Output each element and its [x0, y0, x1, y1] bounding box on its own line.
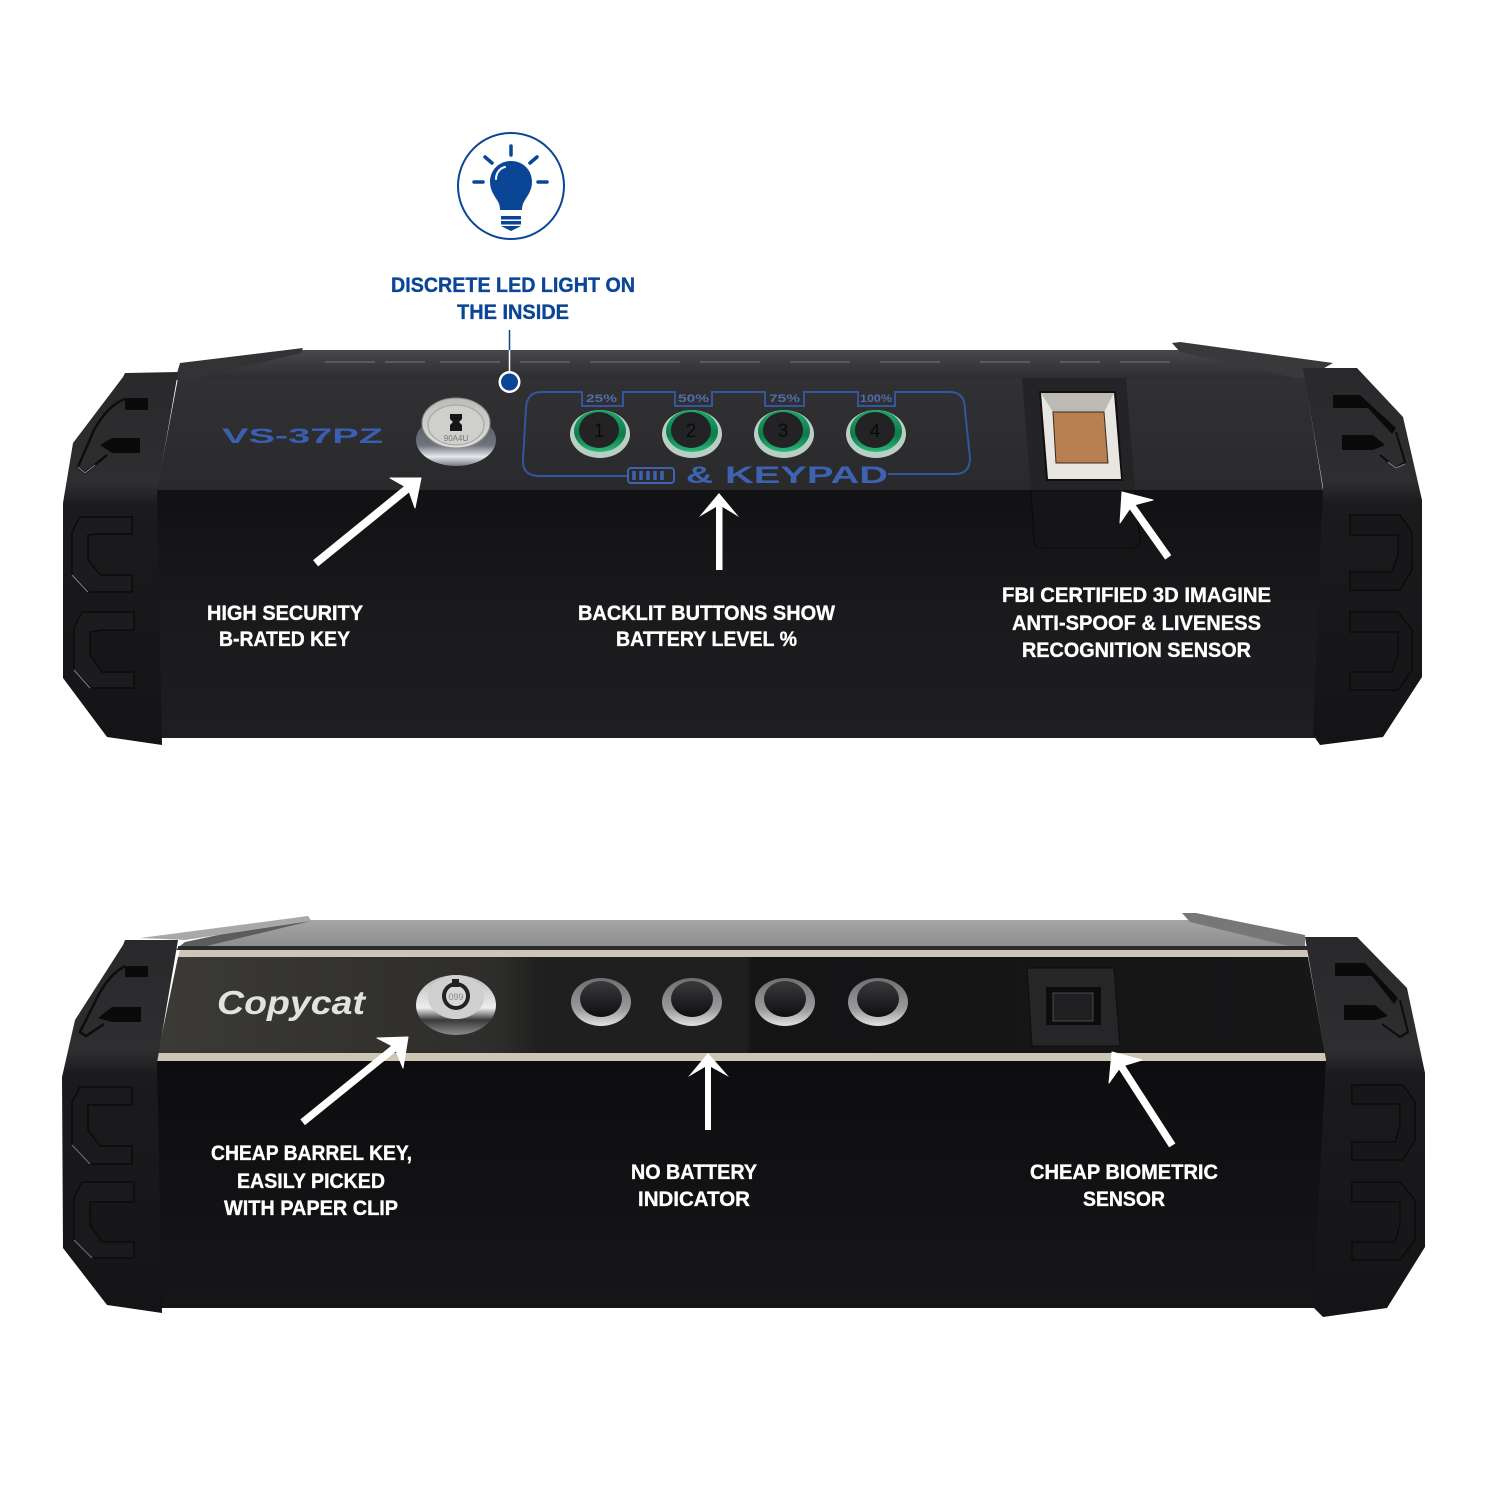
arrow: buttons	[699, 493, 739, 570]
label: high security key: HIGH SECURITY	[207, 602, 363, 625]
panel: VS-37PZ safe	[63, 342, 1422, 745]
icon: light bulb	[458, 133, 564, 239]
right cap grip details	[1352, 1085, 1415, 1260]
label: FBI certified sensor: ANTI-SPOOF & LIVENESS	[1012, 612, 1261, 635]
left end cap	[63, 372, 178, 745]
backlit button 3: 3	[778, 421, 788, 442]
plain button 4	[848, 978, 908, 1026]
key lock: 90A4U	[444, 434, 468, 443]
copycat label: Copycat	[217, 984, 367, 1021]
backlit button 4: 4	[870, 421, 881, 442]
label: cheap barrel key: WITH PAPER CLIP	[224, 1197, 398, 1220]
keypad outline and labels: 50%	[678, 393, 709, 405]
right cap grip details	[1350, 515, 1412, 690]
body lower	[150, 1061, 1330, 1308]
backlit button 3	[754, 410, 814, 458]
model label: VS-37PZ	[222, 425, 383, 448]
label: backlit buttons	[578, 602, 835, 651]
battery icon	[628, 468, 674, 483]
left cap grip details	[72, 1087, 134, 1258]
front panel lower	[150, 490, 1328, 738]
label: backlit buttons: BACKLIT BUTTONS SHOW	[578, 602, 835, 625]
top surface	[175, 920, 1310, 950]
plain button 3	[755, 978, 815, 1026]
fingerprint sensor	[1022, 378, 1140, 548]
right top flap	[1172, 342, 1333, 380]
heading: LED light callout: THE INSIDE	[457, 301, 569, 324]
keypad outline and labels: 25%	[586, 393, 617, 405]
upper trim strip	[178, 950, 1308, 957]
backlit button 4	[846, 410, 906, 458]
label: cheap barrel key: CHEAP BARREL KEY,	[211, 1142, 412, 1165]
heading: LED light callout	[391, 274, 635, 324]
backlit button 1: 1	[594, 421, 604, 442]
left top flap	[175, 916, 311, 950]
left cap handle details	[80, 966, 148, 1036]
label: FBI certified sensor: RECOGNITION SENSOR	[1022, 639, 1251, 662]
key lock	[416, 398, 496, 466]
label: FBI certified sensor: FBI CERTIFIED 3D IMAGINE	[1002, 584, 1271, 607]
label: high security key: B-RATED KEY	[219, 628, 350, 651]
arrow: cheap sensor	[1109, 1052, 1175, 1147]
left cap handle details	[78, 398, 148, 473]
arrow: sensor	[1120, 492, 1171, 559]
keypad label: KEYPAD	[725, 462, 888, 489]
keypad label	[686, 462, 888, 489]
heading: LED light callout: DISCRETE LED LIGHT ON	[391, 274, 635, 297]
arrow: barrel key	[301, 1037, 408, 1124]
right cap handle details	[1335, 963, 1408, 1037]
front panel upper	[157, 378, 1323, 490]
arrow: key	[314, 478, 421, 566]
left flap highlight	[140, 916, 311, 940]
keypad outline and labels: 75%	[769, 393, 800, 405]
left end cap	[62, 940, 178, 1313]
label: cheap biometric sensor: SENSOR	[1083, 1188, 1165, 1211]
right top flap	[1182, 913, 1305, 950]
label: backlit buttons: BATTERY LEVEL %	[616, 628, 797, 651]
label: no battery indicator: INDICATOR	[638, 1188, 750, 1211]
backlit button 2	[662, 410, 722, 458]
right cap handle details	[1333, 395, 1405, 468]
label: cheap barrel key	[211, 1142, 412, 1220]
label: FBI certified sensor	[1002, 584, 1271, 662]
label: high security key	[207, 602, 363, 651]
label: cheap barrel key: EASILY PICKED	[237, 1170, 385, 1193]
backlit button 1	[570, 410, 630, 458]
top surface	[175, 350, 1310, 380]
keypad outline and labels	[523, 392, 970, 476]
backlit button 2: 2	[686, 421, 696, 442]
label: no battery indicator	[631, 1161, 757, 1211]
plain button 2	[662, 978, 722, 1026]
right end cap	[1303, 368, 1422, 745]
keypad outline and labels: 100%	[860, 393, 892, 405]
glossy panel	[158, 957, 1325, 1053]
right end cap	[1305, 937, 1425, 1317]
label: no battery indicator: NO BATTERY	[631, 1161, 757, 1184]
label: cheap biometric sensor: CHEAP BIOMETRIC	[1030, 1161, 1218, 1184]
plain button 1	[571, 978, 631, 1026]
keypad label: &	[686, 462, 713, 489]
cheap biometric sensor	[1027, 968, 1120, 1046]
left cap grip details	[72, 517, 134, 688]
shadow line	[178, 946, 1308, 950]
lower trim strip	[157, 1053, 1326, 1061]
label: cheap biometric sensor	[1030, 1161, 1218, 1211]
left top flap	[175, 348, 303, 380]
barrel key lock	[416, 975, 496, 1035]
arrow: no indicator	[688, 1053, 729, 1130]
LED pointer	[498, 330, 520, 393]
barrel key lock: 099	[448, 992, 464, 1002]
panel: copycat safe	[62, 913, 1425, 1317]
